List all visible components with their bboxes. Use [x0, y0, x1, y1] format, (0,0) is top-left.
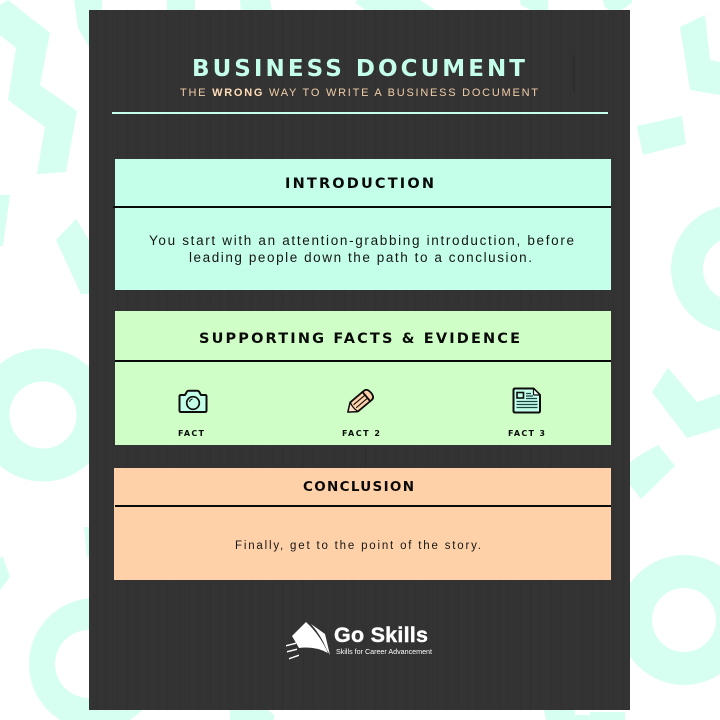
logo: GoSkills [286, 622, 433, 660]
icon: open book [286, 622, 330, 660]
label: fact 3: FACT 3 [508, 429, 545, 438]
panel: conclusion [114, 468, 611, 580]
tagline: Skills for Career Advancement [336, 647, 433, 656]
heading: introduction: INTRODUCTION [285, 176, 434, 192]
text: introduction body: You start with an attention-grabbing introduction, before [149, 233, 574, 248]
header rule [112, 112, 608, 114]
label: fact: FACT [178, 429, 205, 438]
icon: newspaper [514, 388, 540, 412]
text: introduction body [149, 233, 574, 265]
text: introduction body: leading people down the path to a conclusion. [189, 250, 532, 265]
title: BUSINESS DOCUMENT [192, 56, 525, 82]
subtitle: THE WRONG WAY TO WRITE A BUSINESS DOCUMENT [180, 87, 538, 99]
panel: dark wood poster [89, 10, 630, 710]
icon: pencil [344, 388, 375, 417]
panel: supporting facts and evidence [115, 311, 611, 445]
wordmark: Go Skills [334, 623, 428, 647]
text: conclusion body: Finally, get to the point of the story. [235, 540, 481, 552]
heading: conclusion: CONCLUSION [303, 479, 414, 495]
heading: supporting facts: SUPPORTING FACTS & EVIDENCE [199, 331, 520, 347]
label: fact 2: FACT 2 [342, 429, 380, 438]
icon: camera [180, 391, 206, 412]
panel: introduction [113, 159, 611, 290]
